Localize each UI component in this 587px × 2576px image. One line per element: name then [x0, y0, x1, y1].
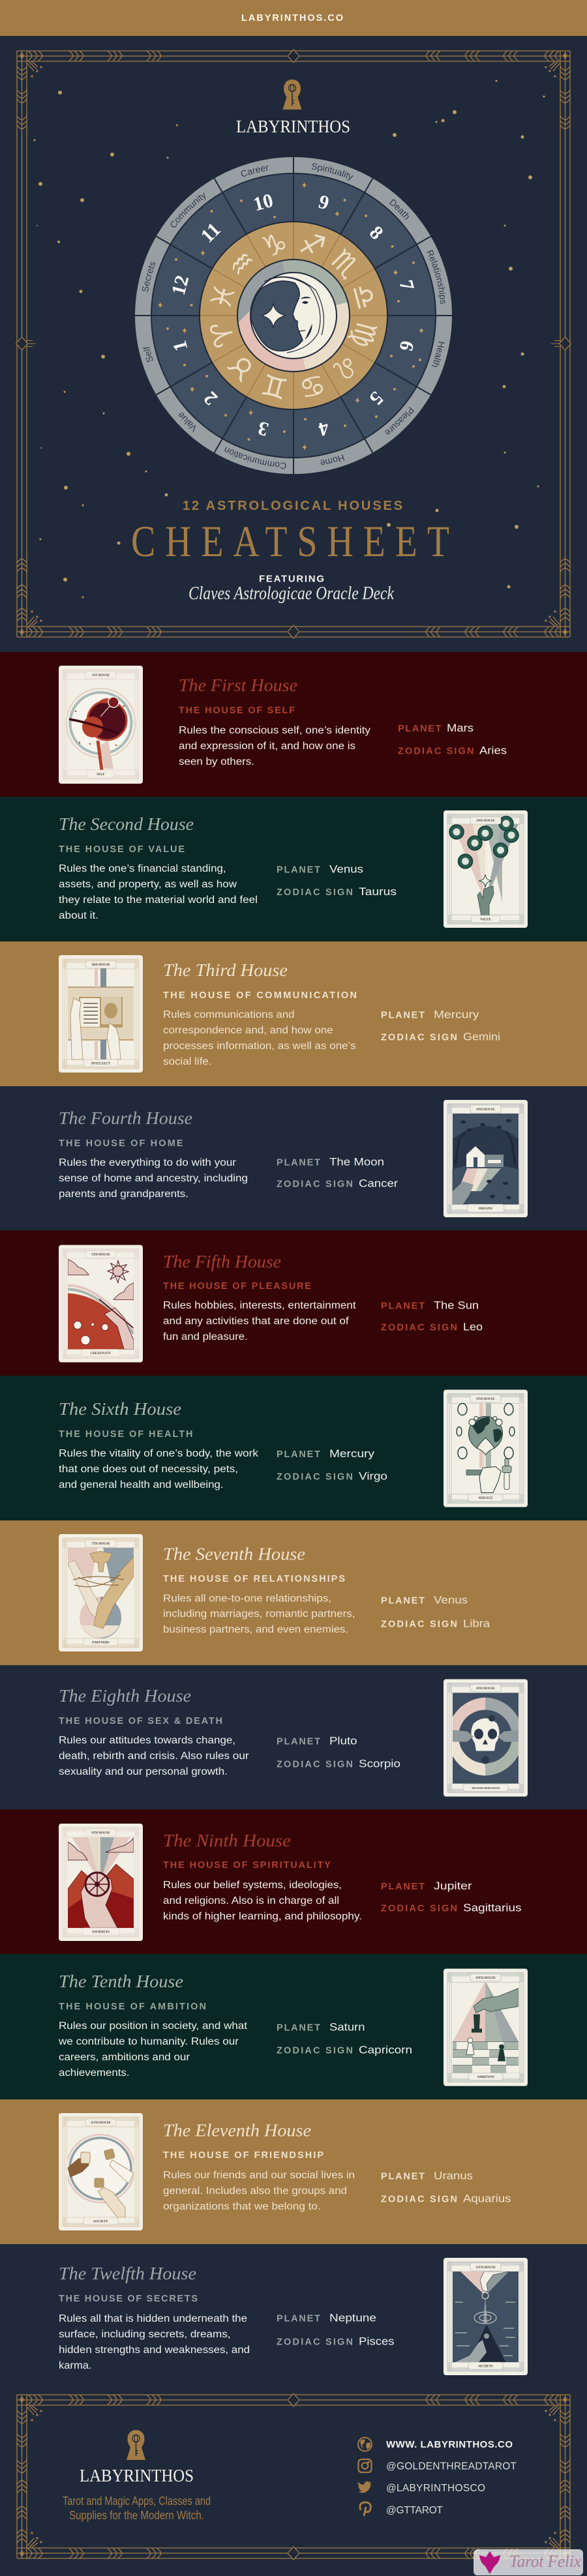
- planet and sign: Capricorn: [359, 2043, 412, 2056]
- main title: CHEATSHEET: [131, 518, 449, 566]
- description: and expression of it, and how one is: [179, 741, 355, 752]
- house subtitle: THE HOUSE OF SPIRITUALITY: [163, 1860, 331, 1871]
- house title: The Twelfth House: [59, 2264, 196, 2283]
- tarot card: society: [59, 2113, 143, 2230]
- panel: first house: [0, 652, 587, 797]
- house theme labels: Secrets: [142, 262, 155, 292]
- tarot card: self: [59, 666, 143, 784]
- description: [59, 1448, 258, 1490]
- icon: twitter: [358, 2481, 372, 2493]
- planet and sign: PLANET: [277, 2022, 320, 2033]
- house numbers: 6: [395, 338, 418, 353]
- description: social life.: [163, 1056, 212, 1067]
- tarot card: intellect: 3RD HOUSE: [91, 964, 110, 967]
- tarot card: service: [444, 1390, 528, 1507]
- planet and sign: PLANET: [277, 2313, 320, 2324]
- planet and sign: PLANET: [398, 724, 442, 734]
- planet and sign: Pisces: [359, 2335, 394, 2347]
- panel: third house: [0, 941, 587, 1086]
- tarot card: origins: ORIGINS: [479, 1207, 493, 1211]
- planet and sign: PLANET: [381, 1596, 425, 1606]
- website: WWW. LABYRINTHOS.CO: [386, 2439, 513, 2450]
- tarot card: creativity: 5TH HOUSE: [91, 1253, 110, 1257]
- house numbers: 4: [316, 417, 331, 440]
- description: and religions. Also is in charge of all: [163, 1895, 339, 1906]
- icon: lotus: [479, 2551, 500, 2574]
- header bar: [0, 0, 587, 36]
- background stars: [34, 80, 545, 599]
- house theme labels: Relationships: [427, 250, 446, 304]
- description: achievements.: [59, 2067, 129, 2079]
- house subtitle: THE HOUSE OF SECRETS: [59, 2294, 198, 2304]
- description: Rules our position in society, and what: [59, 2021, 248, 2032]
- description: Rules all one-to-one relationships,: [163, 1593, 331, 1604]
- planet and sign: Venus: [434, 1593, 468, 1606]
- planet and sign: ZODIAC SIGN: [277, 887, 353, 898]
- house numbers: 2: [200, 387, 222, 409]
- icon: four-point star: [262, 303, 286, 328]
- planet and sign: Libra: [463, 1617, 490, 1630]
- tagline: Supplies for the Modern Witch.: [69, 2509, 204, 2522]
- subtitle: 12 ASTROLOGICAL HOUSES: [183, 499, 402, 513]
- icon: globe: [358, 2437, 372, 2451]
- description: organizations that we belong to.: [163, 2201, 321, 2212]
- tarot card: secrets: [444, 2258, 528, 2375]
- tagline: Tarot and Magic Apps, Classes and: [63, 2495, 211, 2508]
- house subtitle: THE HOUSE OF AMBITION: [59, 2002, 206, 2012]
- house numbers: 5: [365, 387, 387, 409]
- astrological wheel: [135, 157, 452, 474]
- house theme labels: Self: [143, 347, 153, 363]
- center moon: [235, 258, 352, 375]
- tarot card: creativity: CREATIVITY: [91, 1352, 112, 1355]
- house numbers: 11: [196, 218, 225, 247]
- planet and sign: The Moon: [329, 1155, 384, 1168]
- logo wordmark: LABYRINTHOS: [80, 2466, 194, 2485]
- house title: The Eleventh House: [163, 2120, 311, 2140]
- planet and sign: ZODIAC SIGN: [398, 746, 474, 756]
- tarot card: self: 1ST HOUSE: [92, 674, 110, 677]
- planet and sign: ZODIAC SIGN: [277, 1759, 353, 1769]
- planet and sign: [381, 1593, 490, 1630]
- description: Rules the one’s financial standing,: [59, 863, 226, 874]
- zodiac ring: ♊︎: [258, 366, 292, 405]
- description: seen by others.: [179, 756, 254, 767]
- tarot card: intellect: [59, 955, 143, 1073]
- planet and sign: Gemini: [463, 1030, 500, 1043]
- tarot card: secrets: 12TH HOUSE: [475, 2266, 496, 2270]
- description: about it.: [59, 910, 98, 921]
- description: kinds of higher learning, and philosophy.: [163, 1911, 362, 1922]
- planet and sign: [277, 863, 397, 898]
- zodiac ring: ♈︎: [204, 318, 243, 351]
- house numbers: [168, 190, 418, 440]
- house title: The Fourth House: [59, 1108, 192, 1128]
- planet and sign: [381, 2170, 511, 2205]
- panel: twelfth house: [59, 2258, 528, 2375]
- description: [59, 1157, 248, 1200]
- planet and sign: PLANET: [381, 1011, 425, 1021]
- house theme labels: Home: [320, 454, 344, 466]
- description: surface, including secrets, dreams,: [59, 2329, 231, 2340]
- house theme labels: Health: [432, 342, 445, 367]
- planet and sign: PLANET: [381, 1882, 425, 1892]
- house title: The Sixth House: [59, 1399, 181, 1419]
- zodiac ring: ♒︎: [221, 243, 263, 285]
- house subtitle: THE HOUSE OF PLEASURE: [163, 1281, 311, 1292]
- planet and sign: PLANET: [277, 865, 320, 875]
- description: processes information, as well as one’s: [163, 1041, 356, 1052]
- tarot card: value: VALUE: [480, 918, 492, 922]
- house title: The First House: [179, 675, 297, 695]
- planet and sign: Scorpio: [359, 1758, 400, 1769]
- description: fun and pleasure.: [163, 1331, 248, 1342]
- planet and sign: Mars: [447, 722, 474, 734]
- house title: The Seventh House: [163, 1544, 305, 1563]
- description: [163, 1300, 356, 1342]
- planet and sign: Taurus: [359, 885, 397, 898]
- description: that one does out of necessity, pets,: [59, 1464, 238, 1475]
- ring stars: [158, 182, 424, 451]
- planet and sign: Sagittarius: [463, 1901, 522, 1914]
- description: parents and grandparents.: [59, 1189, 188, 1200]
- tarot card: origins: [444, 1100, 528, 1217]
- planet and sign: [277, 2021, 412, 2056]
- planet and sign: [277, 1447, 387, 1483]
- planet and sign: ZODIAC SIGN: [381, 1904, 457, 1914]
- pinterest handle: @GTTAROT: [386, 2505, 444, 2516]
- planet and sign: [381, 1880, 522, 1914]
- zodiac ring: ♍︎: [344, 318, 383, 351]
- zodiac ring: ♐︎: [295, 226, 329, 265]
- tarot card: service: SERVICE: [478, 1497, 493, 1500]
- house subtitle: THE HOUSE OF HEALTH: [59, 1429, 193, 1440]
- planet and sign: [277, 2312, 394, 2347]
- house numbers: 8: [365, 222, 387, 244]
- icon: instagram: [359, 2459, 372, 2472]
- house title: The Ninth House: [163, 1831, 291, 1850]
- icon: pinterest: [360, 2502, 370, 2516]
- tarot card: secrets: SECRETS: [478, 2365, 493, 2368]
- description: correspondence and, and how one: [163, 1025, 333, 1036]
- panel: footer: [17, 2393, 570, 2560]
- planet and sign: [277, 1734, 400, 1769]
- zodiac ring: ♌︎: [324, 346, 366, 388]
- zodiac ring: ♓︎: [204, 280, 243, 314]
- twitter handle: @LABYRINTHOSCO: [386, 2483, 485, 2494]
- tarot card: journeys: 9TH HOUSE: [91, 1832, 110, 1835]
- planet and sign: Saturn: [329, 2021, 365, 2033]
- planet and sign: [381, 1008, 500, 1043]
- tarot card: ambition: 10TH HOUSE: [475, 1977, 496, 1980]
- house numbers: 3: [256, 417, 271, 440]
- planet and sign: [277, 1155, 398, 1189]
- zodiac ring: ♉︎: [221, 346, 263, 388]
- house theme labels: Spirituality: [312, 163, 354, 181]
- house theme labels: Career: [241, 166, 269, 177]
- house title: The Fifth House: [163, 1252, 281, 1271]
- description: we contribute to humanity. Rules our: [58, 2036, 239, 2047]
- planet and sign: Mercury: [329, 1447, 375, 1460]
- planet and sign: PLANET: [277, 1158, 320, 1168]
- planet and sign: Uranus: [434, 2170, 473, 2182]
- planet and sign: ZODIAC SIGN: [277, 2337, 353, 2347]
- description: Rules hobbies, interests, entertainment: [163, 1300, 356, 1311]
- house subtitle: THE HOUSE OF HOME: [59, 1138, 183, 1149]
- planet and sign: PLANET: [277, 1449, 320, 1460]
- description: sense of home and ancestry, including: [59, 1173, 248, 1184]
- planet and sign: PLANET: [277, 1737, 320, 1747]
- planet and sign: PLANET: [381, 2171, 425, 2182]
- tarot card: value: [444, 810, 528, 928]
- planet and sign: ZODIAC SIGN: [277, 2046, 353, 2056]
- description: Rules our friends and our social lives in: [163, 2170, 355, 2181]
- planet and sign: PLANET: [381, 1301, 425, 1312]
- house theme labels: [142, 163, 446, 469]
- description: Rules all that is hidden underneath the: [59, 2313, 247, 2324]
- house theme labels: Communication: [224, 447, 286, 469]
- description: careers, ambitions and our: [59, 2052, 190, 2063]
- tarot card: journeys: JOURNEYS: [92, 1931, 110, 1934]
- planet and sign: Aries: [479, 745, 507, 756]
- planet and sign: Leo: [463, 1321, 483, 1333]
- house title: The Eighth House: [59, 1686, 191, 1706]
- featuring label: FEATURING: [259, 574, 324, 584]
- house theme labels: Death: [389, 199, 409, 220]
- zodiac ring: ♎︎: [344, 280, 383, 314]
- house theme labels: Value: [179, 412, 196, 432]
- description: [59, 2313, 250, 2371]
- description: death, rebirth and crisis. Also rules our: [59, 1751, 249, 1762]
- tarot card: ambition: [444, 1969, 528, 2086]
- panel: sixth house: [0, 1376, 587, 1520]
- logo: keyhole: [283, 80, 301, 110]
- zodiac ring: ♑︎: [258, 226, 292, 265]
- description: general. Includes also the groups and: [163, 2185, 347, 2197]
- planet and sign: Virgo: [359, 1470, 387, 1483]
- description: hidden strengths and weaknesses, and: [59, 2345, 250, 2356]
- logo wordmark: LABYRINTHOS: [236, 117, 350, 136]
- house numbers: 1: [169, 338, 192, 353]
- panel: eleventh house: [0, 2099, 587, 2244]
- planet and sign: ZODIAC SIGN: [277, 1179, 353, 1189]
- description: [163, 2170, 355, 2212]
- tarot card: partners: 7TH HOUSE: [91, 1543, 110, 1546]
- description: business partners, and even enemies.: [163, 1624, 348, 1635]
- tarot card: transformation: [444, 1680, 528, 1797]
- house title: The Second House: [59, 814, 194, 834]
- tarot card: creativity: [59, 1245, 143, 1363]
- description: Rules the everything to do with your: [59, 1157, 236, 1168]
- deck name: Claves Astrologicae Oracle Deck: [188, 583, 395, 604]
- zodiac ring: ♏︎: [324, 243, 366, 285]
- planet and sign: ZODIAC SIGN: [381, 1620, 457, 1630]
- hero ornamental frame: [16, 50, 571, 638]
- tarot card: transformation: TRANSFORMATION: [472, 1786, 500, 1790]
- planet and sign: ZODIAC SIGN: [381, 2195, 457, 2205]
- house subtitle: THE HOUSE OF SELF: [179, 705, 295, 716]
- panel: ninth house: [0, 1809, 587, 1954]
- tarot card: partners: [59, 1534, 143, 1651]
- panel: tenth house: [0, 1954, 587, 2099]
- tarot card: journeys: [59, 1824, 143, 1941]
- header bar: LABYRINTHOS.CO: [241, 13, 343, 23]
- house theme labels: Community: [171, 192, 206, 228]
- tagline: [63, 2495, 211, 2522]
- house numbers: 12: [168, 273, 193, 297]
- planet and sign: ZODIAC SIGN: [277, 1472, 353, 1483]
- planet and sign: ZODIAC SIGN: [381, 1322, 457, 1333]
- description: they relate to the material world and feel: [59, 895, 258, 906]
- description: Rules our belief systems, ideologies,: [163, 1880, 342, 1891]
- house numbers: 7: [395, 278, 418, 293]
- tarot card: ambition: AMBITION: [477, 2076, 494, 2079]
- description: Rules the conscious self, one’s identity: [179, 725, 370, 736]
- planet and sign: ZODIAC SIGN: [381, 1033, 457, 1043]
- tarot card: value: 2ND HOUSE: [476, 820, 495, 823]
- house subtitle: THE HOUSE OF COMMUNICATION: [163, 990, 357, 1001]
- description: assets, and property, as well as how: [59, 879, 237, 890]
- planet and sign: Aquarius: [463, 2192, 511, 2205]
- footer ornamental frame: [17, 2393, 570, 2560]
- panel: second house: [0, 797, 587, 941]
- panel: eighth house: [59, 1680, 528, 1797]
- planet and sign: Jupiter: [434, 1880, 472, 1892]
- house title: The Tenth House: [59, 1972, 183, 1991]
- tarot card: self: SELF: [97, 773, 105, 777]
- description: sexuality and our personal growth.: [59, 1766, 228, 1777]
- logo: keyhole: [127, 2430, 145, 2460]
- tarot card: society: 11TH HOUSE: [91, 2122, 112, 2125]
- description: [59, 863, 258, 921]
- description: [163, 1009, 356, 1067]
- description: Rules communications and: [163, 1009, 295, 1020]
- description: and general health and wellbeing.: [59, 1479, 224, 1490]
- house subtitle: THE HOUSE OF VALUE: [59, 844, 185, 855]
- panel: hero: [16, 49, 571, 639]
- planet and sign: The Sun: [434, 1299, 479, 1312]
- panel: fifth house: [0, 1230, 587, 1376]
- description: [163, 1880, 362, 1922]
- tarot card: origins: 4TH HOUSE: [476, 1108, 495, 1112]
- planet and sign: Neptune: [329, 2312, 376, 2324]
- planet and sign: [381, 1299, 483, 1333]
- description: and any activities that are done out of: [163, 1316, 349, 1327]
- description: [58, 2021, 248, 2079]
- tarot card: transformation: 8TH HOUSE: [476, 1687, 495, 1691]
- panel: seventh house: [0, 1520, 587, 1665]
- tarot card: service: 6TH HOUSE: [476, 1398, 495, 1401]
- planet and sign: Cancer: [359, 1177, 398, 1189]
- watermark badge: [474, 2549, 583, 2575]
- house theme labels: Pleasure: [385, 407, 414, 434]
- planet and sign: Pluto: [329, 1734, 357, 1747]
- description: [163, 1593, 355, 1635]
- panel: fourth house: [0, 1086, 587, 1230]
- house title: The Third House: [163, 960, 288, 980]
- house numbers: 10: [251, 190, 275, 215]
- planet and sign: [398, 722, 507, 756]
- tarot card: intellect: INTELLECT: [91, 1063, 111, 1065]
- watermark text: Tarot Felix: [509, 2552, 581, 2571]
- zodiac ring: ♋︎: [295, 366, 329, 405]
- house subtitle: THE HOUSE OF RELATIONSHIPS: [163, 1574, 345, 1584]
- description: including marriages, romantic partners,: [163, 1608, 355, 1620]
- tarot card: society: SOCIETY: [93, 2221, 108, 2223]
- house subtitle: THE HOUSE OF SEX & DEATH: [59, 1716, 222, 1726]
- instagram handle: @GOLDENTHREADTAROT: [386, 2461, 517, 2472]
- description: karma.: [59, 2360, 91, 2371]
- tarot card: partners: PARTNERS: [92, 1642, 110, 1644]
- description: Rules our attitudes towards change,: [59, 1735, 235, 1746]
- zodiac ring: [200, 222, 387, 409]
- description: Rules the vitality of one’s body, the work: [59, 1448, 258, 1459]
- description: [179, 725, 370, 767]
- planet and sign: Mercury: [434, 1008, 479, 1021]
- description: [59, 1735, 249, 1777]
- planet and sign: Venus: [329, 863, 363, 875]
- house subtitle: THE HOUSE OF FRIENDSHIP: [163, 2150, 324, 2161]
- house numbers: 9: [316, 191, 331, 214]
